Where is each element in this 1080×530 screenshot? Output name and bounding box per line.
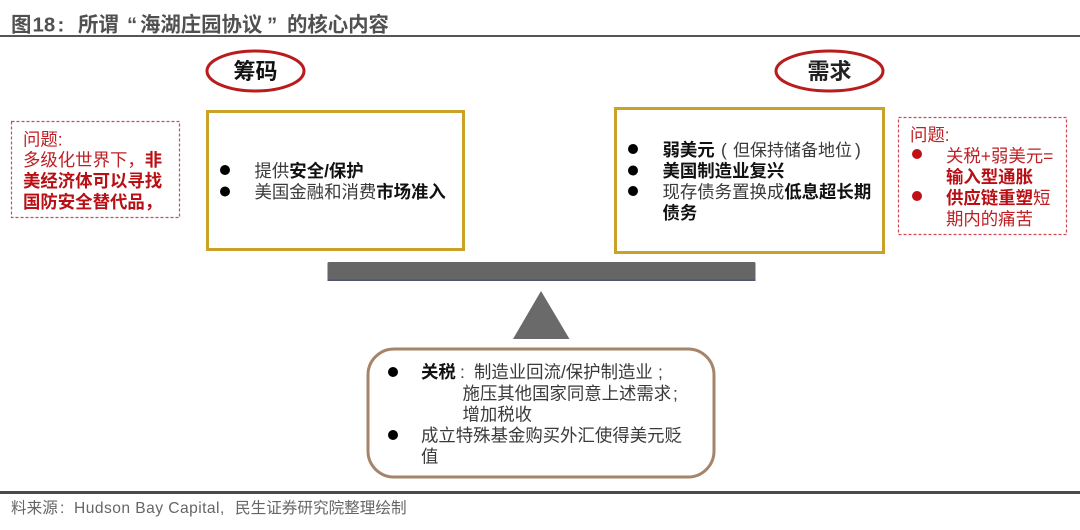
bullet list: chips: 提供安全/保护 xyxy=(254,161,364,181)
title: ” xyxy=(267,14,277,36)
title: 图 xyxy=(11,14,31,36)
ellipse label: 需求: 需求 xyxy=(807,59,852,84)
title: : xyxy=(58,14,64,36)
callout: left problem: 问题: xyxy=(23,130,63,150)
bullet list: demands: 弱美元 xyxy=(662,140,715,160)
bullet list: tools: 制造业回流/保护制造业 xyxy=(474,362,653,382)
bullet list: tools: : xyxy=(460,362,465,382)
panel: demands box xyxy=(616,108,884,252)
title: “ xyxy=(127,14,137,36)
bullet list: tools xyxy=(388,362,682,466)
bullet list: demands: ) xyxy=(855,140,861,160)
title: 的核心内容 xyxy=(287,12,389,36)
bullet list: tools: 关税 xyxy=(421,362,456,382)
bullet list: demands: 现存债务置换成低息超长期 xyxy=(662,182,871,202)
source note: , xyxy=(220,500,224,517)
balance beam xyxy=(328,262,756,281)
bullet list: demands: 美国制造业复兴 xyxy=(662,161,784,181)
ellipse label: 需求 xyxy=(776,51,883,91)
bullet list: demands xyxy=(628,140,871,223)
source note xyxy=(11,498,407,517)
bullet list: tools: ; xyxy=(658,362,663,382)
title xyxy=(11,12,389,36)
callout: right problem: 供应链重塑短 xyxy=(946,188,1050,208)
source note: 料来源 xyxy=(11,499,58,517)
bullet list: tools: ; xyxy=(673,384,678,404)
ellipse label: 筹码 xyxy=(207,51,304,91)
bullet list: demands: 债务 xyxy=(662,203,697,223)
bullet list: tools: 值 xyxy=(421,446,438,466)
callout: right problem: 问题: xyxy=(910,125,950,145)
bullet list: chips: 美国金融和消费市场准入 xyxy=(254,182,446,202)
bullet list: demands: 但保持储备地位 xyxy=(733,141,852,160)
panel: tools box xyxy=(368,349,714,477)
title: 18 xyxy=(32,14,55,36)
source note: : xyxy=(60,500,64,517)
bullet list: chips xyxy=(220,161,446,202)
callout: right problem: 关税+弱美元= xyxy=(946,146,1053,166)
panel: chips box xyxy=(208,112,464,250)
balance fulcrum triangle xyxy=(513,291,570,339)
callout: right problem xyxy=(898,118,1066,234)
ellipse label: 筹码: 筹码 xyxy=(233,59,278,84)
bullet list: tools: 施压其他国家同意上述需求 xyxy=(462,384,671,404)
callout: left problem: 国防安全替代品， xyxy=(23,192,162,212)
callout: right problem: 输入型通胀 xyxy=(946,167,1033,187)
title: 海湖庄园协议 xyxy=(140,12,263,36)
callout: left problem xyxy=(12,122,180,218)
bullet list: demands: ( xyxy=(721,140,727,160)
source note: Hudson Bay Capital xyxy=(74,500,220,517)
callout: left problem: 多级化世界下，非 xyxy=(23,150,162,170)
source note: 民生证券研究院整理绘制 xyxy=(235,498,407,517)
bullet list: tools: 成立特殊基金购买外汇使得美元贬 xyxy=(421,426,682,446)
callout: left problem: 美经济体可以寻找 xyxy=(23,171,162,191)
bullet list: tools: 增加税收 xyxy=(462,404,532,424)
title: 所谓 xyxy=(78,14,119,36)
callout: right problem: 期内的痛苦 xyxy=(946,209,1033,229)
